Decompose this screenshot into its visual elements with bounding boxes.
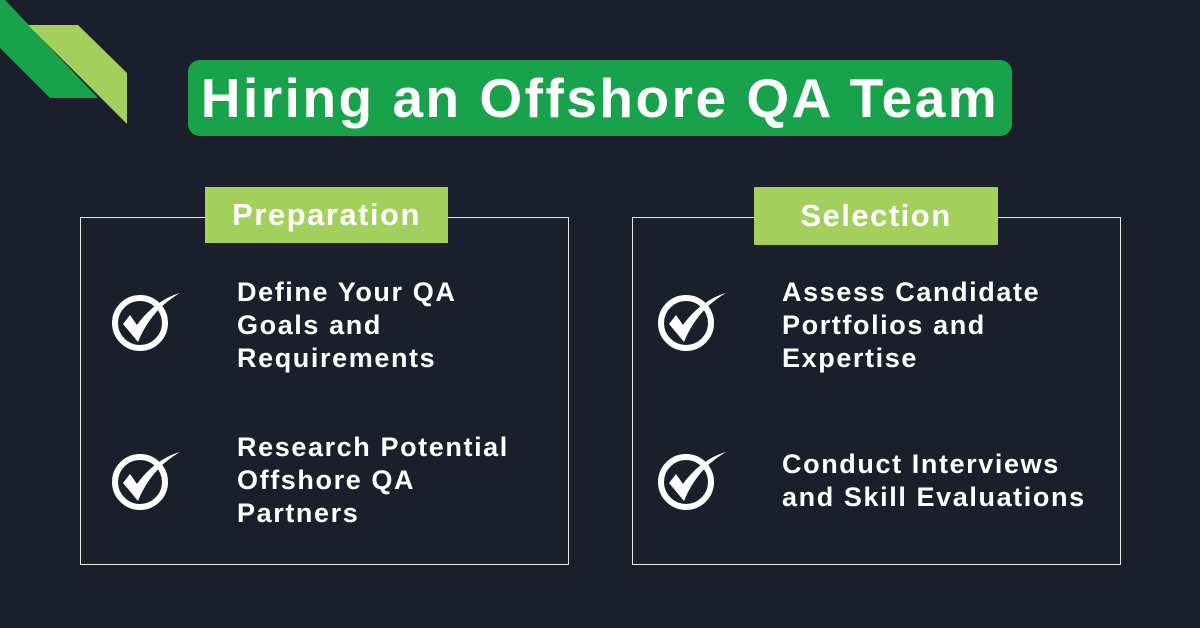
panel: preparation [80, 217, 569, 565]
text: define goals: Define Your QA [237, 277, 456, 307]
text: interviews: Conduct Interviews [782, 449, 1060, 479]
icon: check 3 [658, 293, 726, 351]
text: interviews: and Skill Evaluations [782, 482, 1086, 512]
text: assess portfolios [782, 277, 1040, 373]
text: assess portfolios: Expertise [782, 343, 918, 373]
text: define goals: Requirements [237, 343, 436, 373]
heading: Preparation: Preparation [232, 197, 421, 232]
title: Hiring an Offshore QA Team [201, 67, 999, 129]
text: define goals: Goals and [237, 310, 382, 340]
text: research partners: Research Potential [237, 432, 509, 462]
icon: check 2 [112, 452, 180, 510]
text: research partners [237, 432, 509, 528]
icon: check 1 [112, 293, 180, 351]
icon: check 4 [658, 452, 726, 510]
text: research partners: Offshore QA [237, 465, 415, 495]
heading: Selection: Selection [800, 198, 952, 233]
text: research partners: Partners [237, 498, 359, 528]
text: interviews [782, 449, 1086, 512]
text: assess portfolios: Portfolios and [782, 310, 986, 340]
text: assess portfolios: Assess Candidate [782, 277, 1040, 307]
panel: selection [632, 217, 1121, 565]
heading: Selection [754, 187, 998, 245]
decoration: top-left stripes [0, 0, 127, 124]
heading: Preparation [205, 187, 448, 243]
text: define goals [237, 277, 456, 373]
